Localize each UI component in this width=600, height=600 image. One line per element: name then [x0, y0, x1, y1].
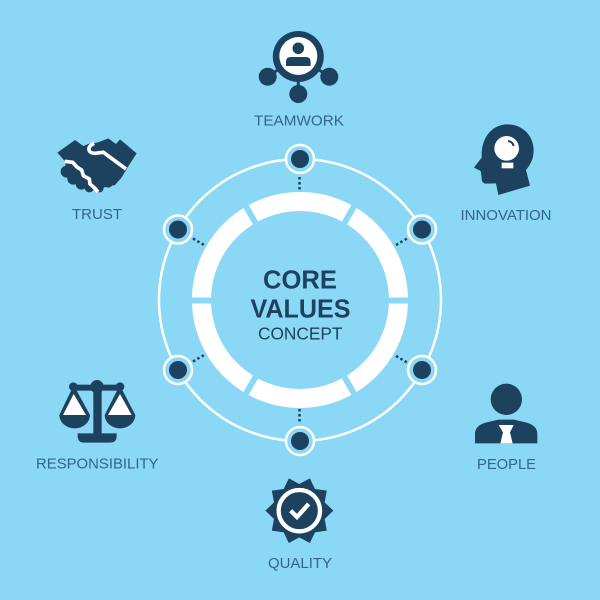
label: responsibility: RESPONSIBILITY — [36, 456, 158, 472]
label: trust: TRUST — [72, 206, 122, 223]
icon: handshake — [57, 138, 137, 192]
label: people: PEOPLE — [477, 456, 536, 473]
connector dots — [193, 177, 408, 423]
icon: innovation head — [474, 124, 534, 195]
outer ring — [159, 159, 441, 441]
label: innovation: INNOVATION — [460, 207, 552, 224]
segmented inner ring — [185, 200, 415, 400]
node: lower right — [408, 356, 436, 384]
icon: teamwork — [259, 31, 338, 103]
node: upper right — [408, 216, 436, 244]
center title — [250, 266, 350, 344]
label: teamwork: TEAMWORK — [254, 112, 344, 130]
icon: scales — [59, 380, 135, 443]
label: quality: QUALITY — [268, 555, 332, 572]
center title: VALUES — [250, 295, 350, 323]
center title: CONCEPT — [258, 324, 343, 344]
icon: quality badge — [265, 478, 333, 543]
icon: people — [475, 384, 537, 443]
center title: CORE — [263, 266, 337, 294]
node: bottom — [286, 427, 314, 455]
node: upper left — [164, 216, 192, 244]
node: lower left — [164, 356, 192, 384]
node: top — [286, 145, 314, 173]
